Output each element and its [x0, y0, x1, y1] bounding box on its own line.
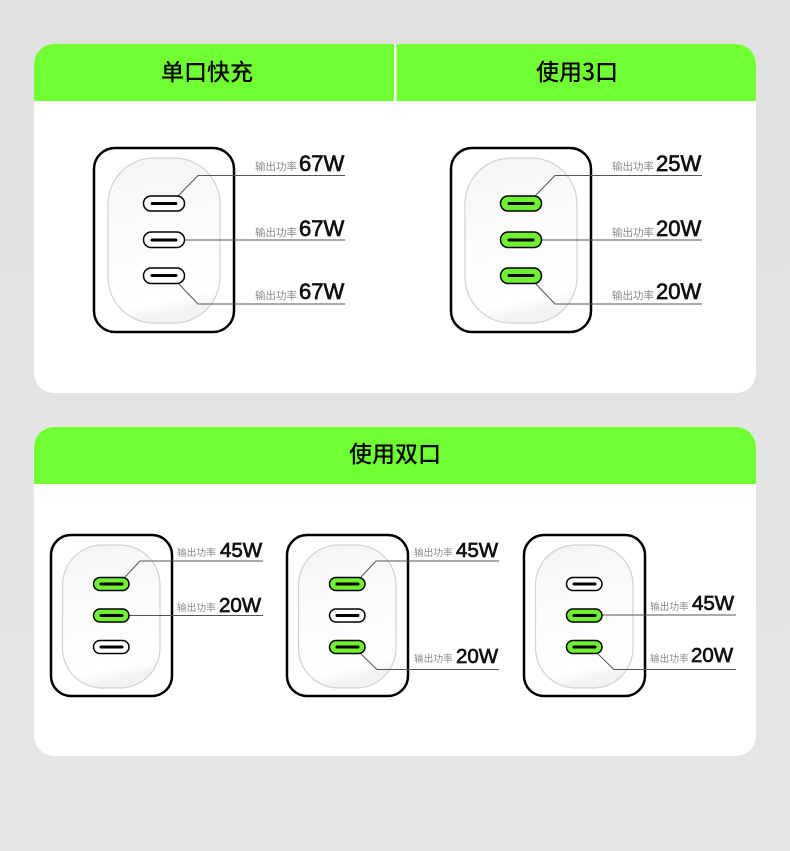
charger diagram: dual ports middle and bottom: 输出功率	[650, 652, 689, 665]
charger diagram: three ports 25W 20W 20W: 25W	[656, 151, 701, 176]
charger diagram: dual ports top and middle	[51, 535, 263, 696]
charger diagram: dual ports top and bottom: 输出功率	[414, 546, 453, 559]
charger diagram: dual ports middle and bottom	[524, 535, 736, 696]
charger diagram: three ports 25W 20W 20W: 输出功率	[612, 160, 654, 173]
charger diagram: single port 67W: 输出功率	[255, 289, 297, 302]
charger diagram: dual ports middle and bottom: 输出功率	[650, 600, 689, 613]
charger diagram: dual ports top and middle: 45W	[220, 539, 263, 562]
header: using 3 ports: 使用3口	[536, 53, 618, 87]
header: single port fast charge: 单口快充	[161, 53, 253, 87]
header: using two ports	[34, 427, 756, 484]
charger diagram: single port 67W	[94, 148, 345, 332]
panel: top card	[34, 44, 756, 393]
header: using 3 ports	[396, 44, 756, 101]
charger diagram: single port 67W: 67W	[299, 216, 344, 241]
panel: bottom card	[34, 427, 756, 756]
charger diagram: dual ports top and bottom: 输出功率	[414, 652, 453, 665]
header: using two ports: 使用双口	[349, 435, 441, 469]
charger diagram: dual ports top and middle: 20W	[219, 594, 262, 617]
charger diagram: dual ports top and bottom	[287, 535, 499, 696]
charger diagram: single port 67W: 67W	[299, 279, 344, 304]
charger diagram: three ports 25W 20W 20W: 20W	[656, 216, 701, 241]
charger diagram: dual ports top and middle: 输出功率	[177, 601, 216, 614]
header: single port fast charge	[34, 44, 394, 101]
charger diagram: three ports 25W 20W 20W: 20W	[656, 279, 701, 304]
charger diagram: three ports 25W 20W 20W: 输出功率	[612, 226, 654, 239]
charger diagram: three ports 25W 20W 20W: 输出功率	[612, 289, 654, 302]
charger diagram: dual ports middle and bottom: 45W	[692, 592, 735, 615]
charger diagram: dual ports middle and bottom: 20W	[691, 644, 734, 667]
charger diagram: dual ports top and bottom: 45W	[456, 539, 499, 562]
charger diagram: dual ports top and bottom: 20W	[456, 645, 499, 668]
charger diagram: three ports 25W 20W 20W	[451, 148, 702, 332]
charger diagram: dual ports top and middle: 输出功率	[177, 546, 216, 559]
charger diagram: single port 67W: 67W	[299, 151, 344, 176]
charger diagram: single port 67W: 输出功率	[255, 160, 297, 173]
charger diagram: single port 67W: 输出功率	[255, 226, 297, 239]
